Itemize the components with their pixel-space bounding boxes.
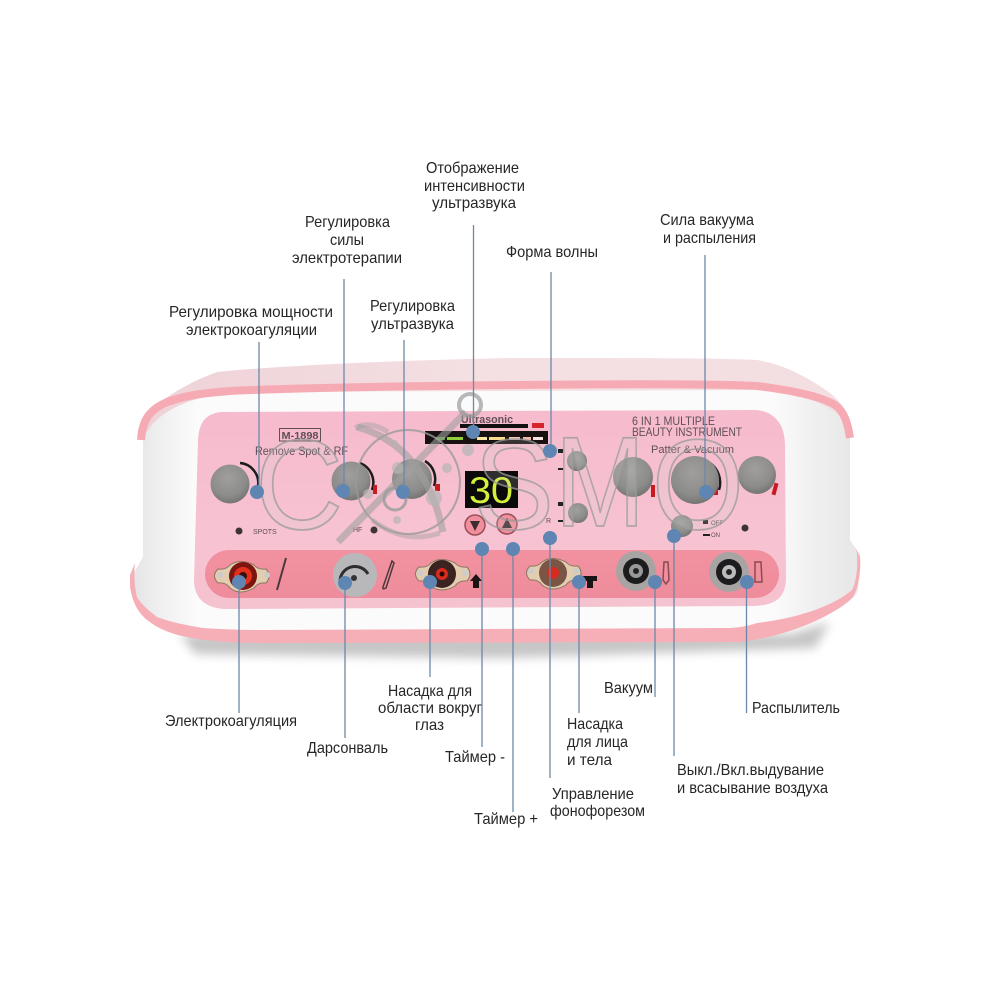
- icon: up arrow: [470, 574, 482, 588]
- label: darsonval: Дарсонваль: [307, 740, 388, 757]
- label: ultrasound intensity display: интенсивности: [424, 178, 525, 195]
- label: ultrasound adjustment: [370, 298, 455, 333]
- label: air blow and suction switch: Выкл./Вкл.выдувание: [677, 762, 824, 779]
- label: ultrasound intensity display: Отображение: [426, 160, 519, 177]
- label: phonophoresis control: фонофорезом: [550, 803, 645, 820]
- device lid: [140, 358, 850, 445]
- label: timer plus: Таймер +: [474, 811, 538, 828]
- label: electrotherapy strength: Регулировка: [305, 214, 390, 231]
- panel labels: SPOTS: [253, 529, 277, 536]
- label: eye area attachment: [378, 683, 482, 734]
- timer display: 30: [469, 470, 513, 511]
- label: air blow and suction switch: [677, 762, 828, 797]
- waveform and mode switches: [558, 449, 710, 537]
- label: vacuum and spray strength: [660, 212, 756, 247]
- panel labels: 6 IN 1 MULTIPLE: [632, 414, 715, 428]
- label: eye area attachment: Насадка для: [388, 683, 472, 700]
- label: phonophoresis control: Управление: [552, 786, 634, 803]
- label: vacuum: Вакуум: [604, 680, 653, 697]
- device upper pink band: [141, 384, 850, 440]
- watermark: COSMO: [255, 394, 744, 557]
- label: electrocoagulation power: [169, 304, 333, 339]
- label: eye area attachment: глаз: [415, 717, 444, 734]
- timer buttons: [465, 514, 517, 535]
- panel labels: Patter & Vacuum: [651, 444, 734, 456]
- label: ultrasound adjustment: Регулировка: [370, 298, 455, 315]
- label: face and body attachment: Насадка: [567, 716, 623, 733]
- icon: T handle: [583, 576, 597, 588]
- indicator lights: [236, 524, 748, 534]
- label: face and body attachment: для лица: [567, 734, 628, 751]
- label: vacuum and spray strength: и распыления: [663, 230, 756, 247]
- label: timer minus: Таймер -: [445, 749, 505, 766]
- watermark: COSMO: C: [255, 414, 343, 557]
- label: electrotherapy strength: [292, 214, 402, 267]
- watermark: COSMO: O: [652, 414, 744, 557]
- label: waveform: Форма волны: [506, 244, 598, 261]
- knobs: [210, 456, 778, 504]
- label: face and body attachment: и тела: [567, 752, 612, 769]
- panel labels: R: [546, 518, 551, 525]
- label: electrocoagulation power: Регулировка мощности: [169, 304, 333, 321]
- panel labels: M-1898: [282, 431, 319, 442]
- label: air blow and suction switch: и всасывание воздуха: [677, 780, 828, 797]
- label: electrotherapy strength: силы: [330, 232, 364, 249]
- connectors: [214, 551, 749, 597]
- label: face and body attachment: [567, 716, 628, 769]
- leader lines: [239, 225, 746, 812]
- panel labels: OFF: [711, 521, 723, 527]
- control panel: [194, 410, 786, 609]
- panel labels: [253, 414, 743, 539]
- watermark: COSMO: M: [555, 411, 645, 554]
- device lower pink band: [130, 547, 860, 643]
- label: phonophoresis control: [550, 786, 645, 820]
- panel labels: Ultrasonic: [461, 414, 513, 426]
- watermark atom: [338, 394, 481, 542]
- label: ultrasound intensity display: [424, 160, 525, 212]
- label: ultrasound adjustment: ультразвука: [371, 316, 454, 333]
- device: pink beauty instrument: [130, 358, 860, 643]
- connector icons: [277, 558, 762, 590]
- label: eye area attachment: области вокруг: [378, 700, 482, 717]
- callout dots: [232, 425, 754, 590]
- panel labels: Remove Spot & RF: [255, 444, 348, 458]
- panel labels: BEAUTY INSTRUMENT: [632, 425, 743, 439]
- label: electrocoagulation: Электрокоагуляция: [165, 713, 297, 730]
- label: vacuum and spray strength: Сила вакуума: [660, 212, 754, 229]
- connector strip: [205, 550, 779, 598]
- label: electrotherapy strength: электротерапии: [292, 250, 402, 267]
- watermark: COSMO: S: [474, 414, 554, 557]
- label: electrocoagulation power: электрокоагуляции: [186, 322, 317, 339]
- label: sprayer: Распылитель: [752, 700, 840, 717]
- ultrasonic intensity meter: [425, 423, 548, 444]
- panel labels: HF: [353, 527, 362, 534]
- device white body: [131, 390, 860, 636]
- device shadow: [180, 622, 830, 658]
- panel labels: ON: [711, 533, 720, 539]
- label: ultrasound intensity display: ультразвука: [432, 195, 516, 212]
